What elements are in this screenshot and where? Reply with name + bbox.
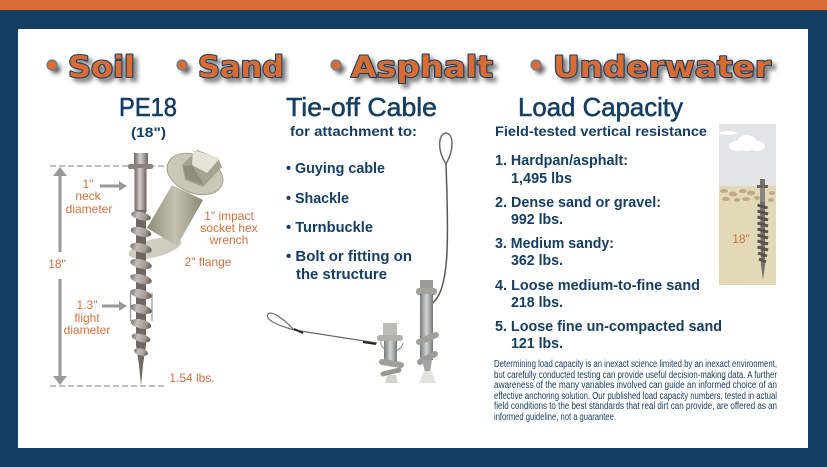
label: hex wrench bbox=[200, 209, 258, 247]
load list: 3. Medium sandy: bbox=[495, 235, 614, 252]
load list: 362 lbs. bbox=[511, 252, 563, 269]
label: length: 18" bbox=[48, 257, 66, 271]
attachment list bbox=[286, 160, 412, 283]
label: flight diameter: 1.3" bbox=[77, 298, 97, 312]
label: flight diameter bbox=[64, 298, 110, 337]
attachment list: • Turnbuckle bbox=[286, 219, 373, 236]
label: flight diameter: flight bbox=[74, 311, 100, 325]
label: hex wrench: socket hex bbox=[200, 221, 258, 235]
load list: 5. Loose fine un-compacted sand bbox=[495, 318, 722, 335]
heading: surface types bbox=[47, 50, 776, 88]
load list: 2. Dense sand or gravel: bbox=[495, 194, 661, 211]
Load subtitle: Field-tested vertical resistance bbox=[495, 124, 708, 139]
icon: cable with short anchor bbox=[267, 313, 403, 383]
heading: surface types: Soil bbox=[68, 50, 135, 84]
label: neck diameter: diameter bbox=[66, 202, 112, 216]
icon: cable with tall anchor bbox=[416, 133, 452, 383]
heading: surface types: Asphalt bbox=[351, 50, 493, 84]
attachment list: • Shackle bbox=[286, 190, 349, 207]
label: hex wrench: 1" impact bbox=[204, 209, 254, 223]
dimension lines bbox=[50, 166, 167, 386]
load list: 1. Hardpan/asphalt: bbox=[495, 152, 628, 169]
label: neck diameter: 1" bbox=[83, 177, 93, 191]
Tie-off Cable title: Tie-off Cable bbox=[286, 92, 437, 122]
label: neck diameter: neck bbox=[75, 189, 102, 203]
panel: load capacity bbox=[494, 92, 778, 423]
Tie-off subtitle: for attachment to: bbox=[290, 124, 417, 139]
load list: 218 lbs. bbox=[511, 294, 563, 311]
heading: surface types: Soil bbox=[72, 54, 139, 88]
label: flight diameter: diameter bbox=[64, 323, 110, 337]
disclaimer text: informed guideline, not a guarantee. bbox=[494, 412, 616, 423]
attachment list: the structure bbox=[296, 266, 387, 283]
icon: PE18 screw anchor bbox=[128, 153, 153, 386]
Load Capacity title: Load Capacity bbox=[518, 92, 683, 122]
label: weight: 1.54 lbs. bbox=[169, 371, 215, 385]
load list bbox=[495, 152, 722, 352]
heading: surface types: Underwater bbox=[553, 50, 772, 84]
load list: 121 lbs. bbox=[511, 335, 563, 352]
icon: socket hex wrench bbox=[127, 146, 229, 263]
heading: surface types: Asphalt bbox=[355, 54, 497, 88]
panel: tie-off cable bbox=[267, 92, 452, 383]
label: 18 inch depth: 18" bbox=[732, 232, 750, 246]
label: neck diameter bbox=[66, 177, 112, 216]
panel: PE18 bbox=[48, 92, 258, 386]
load list: 992 lbs. bbox=[511, 211, 563, 228]
label: flange: 2" flange bbox=[185, 255, 232, 269]
label: hex wrench: wrench bbox=[209, 233, 248, 247]
load list: 4. Loose medium-to-fine sand bbox=[495, 277, 700, 294]
PE18 subtitle: (18") bbox=[131, 124, 166, 140]
PE18 title: PE18 bbox=[119, 92, 177, 122]
attachment list: • Guying cable bbox=[286, 160, 385, 177]
load list: 1,495 lbs bbox=[511, 170, 572, 187]
heading: surface types: Sand bbox=[202, 54, 288, 88]
soil diagram bbox=[719, 124, 776, 285]
heading: surface types: Underwater bbox=[557, 54, 776, 88]
heading: surface types: Sand bbox=[198, 50, 284, 84]
attachment list: • Bolt or fitting on bbox=[286, 248, 412, 265]
disclaimer text bbox=[494, 359, 778, 423]
